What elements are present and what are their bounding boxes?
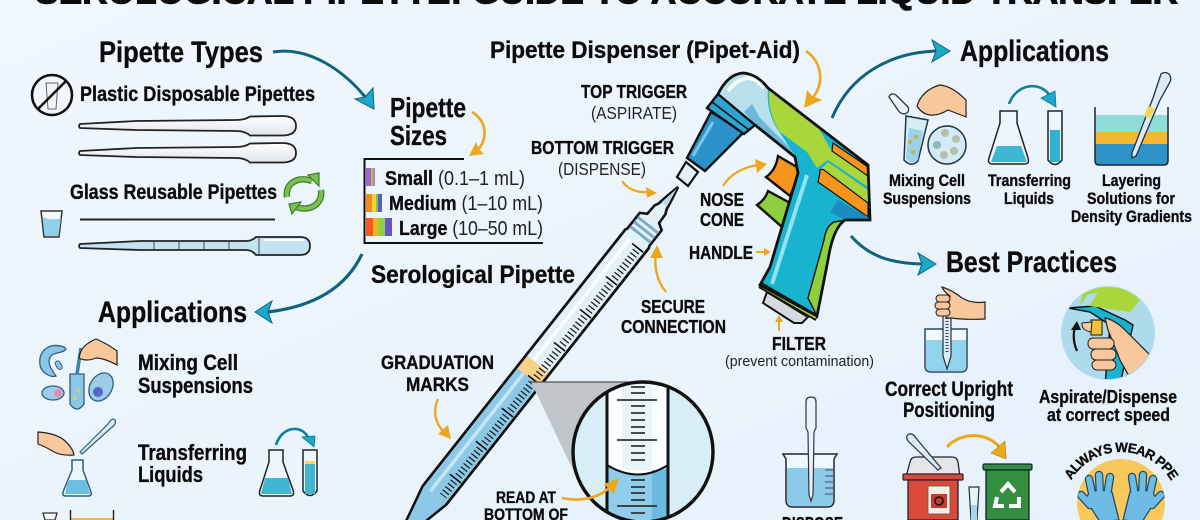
label: nose cone — [700, 190, 744, 230]
label: plastic disposable: Plastic Disposable Pipettes — [80, 83, 315, 106]
size: small: Small (0.1–1 mL) — [385, 168, 525, 190]
arrow: graduation marks — [435, 399, 451, 439]
nose tip — [677, 162, 698, 186]
icon: always wear ppe — [1065, 442, 1179, 520]
label: aspirate — [1039, 387, 1177, 425]
bottom trigger — [757, 191, 792, 227]
panel: applications left — [38, 296, 317, 520]
size: medium: Medium (1–10 mL) — [389, 193, 543, 215]
label: graduation marks: MARKS — [406, 375, 469, 396]
label: layering: Solutions for — [1087, 189, 1175, 208]
filter — [763, 292, 808, 323]
label: handle: HANDLE — [689, 243, 753, 263]
plastic pipette 1 — [79, 116, 296, 136]
icon: recycle arrows — [287, 173, 321, 214]
label: mixing cell left — [138, 350, 253, 398]
arrow: handle — [756, 248, 771, 256]
label: mixing cell left: Suspensions — [138, 373, 253, 398]
label: filter: (prevent contamination) — [725, 354, 874, 370]
label: bottom trigger: (DISPENSE) — [558, 159, 646, 179]
arrow: filter — [775, 315, 783, 331]
icon: aspirate dispense speed — [1061, 286, 1155, 380]
arrow: dispenser — [804, 51, 822, 108]
heading: pipette sizes: Pipette — [390, 92, 466, 123]
plastic pipette 2 — [79, 143, 296, 162]
collar band — [712, 102, 749, 130]
label: filter — [725, 334, 874, 370]
serological pipette — [369, 178, 690, 520]
pipette dispenser gun — [677, 73, 870, 323]
nose cone highlight — [693, 122, 713, 156]
head highlight — [728, 78, 764, 91]
label: bottom trigger: BOTTOM TRIGGER — [531, 138, 674, 158]
label: nose cone: CONE — [700, 210, 744, 230]
label: upright: Positioning — [903, 399, 995, 422]
label: read at bottom: READ AT — [496, 488, 556, 507]
label: transferring left: Transferring — [138, 440, 247, 465]
label: top trigger: (ASPIRATE) — [591, 103, 677, 123]
swatch: medium — [366, 194, 382, 212]
head — [718, 73, 796, 157]
glass pipette — [79, 237, 310, 255]
handle highlight — [772, 175, 807, 284]
label: secure connection — [621, 296, 726, 337]
heading: serological pipette: Serological Pipette — [371, 261, 575, 289]
green handle inlay — [808, 220, 846, 316]
icon: mixing cell suspensions — [40, 339, 118, 409]
icon: transferring right — [988, 86, 1062, 164]
icon: flask and tube transfer — [259, 429, 317, 496]
label: mixing cell left: Mixing Cell — [138, 350, 238, 375]
label: upright: Correct Upright — [885, 378, 1013, 401]
icon: upright positioning — [925, 287, 985, 372]
heading: applications left: Applications — [98, 296, 247, 329]
top trigger — [766, 156, 802, 196]
icon: layering left — [43, 510, 114, 520]
heading: pipette dispenser: Pipette Dispenser (Pipet-Aid) — [490, 37, 800, 64]
label: mixing cell right: Mixing Cell — [889, 171, 965, 190]
panel: pipette types — [32, 36, 321, 255]
body outline — [718, 73, 870, 316]
label: layering — [1071, 171, 1192, 226]
label: aspirate: Aspirate/Dispense — [1039, 387, 1177, 407]
arrow: secure connection — [650, 245, 666, 292]
icon: cup — [41, 211, 62, 237]
label: glass reusable: Glass Reusable Pipettes — [70, 181, 277, 204]
sizes bracket — [364, 159, 543, 243]
arrow: nose cone — [723, 159, 767, 186]
green lower band — [820, 162, 868, 202]
label: secure connection: SECURE — [641, 296, 705, 317]
green top panel — [769, 90, 868, 187]
collar — [707, 94, 755, 134]
divider line — [80, 218, 275, 220]
label: filter: FILTER — [772, 334, 826, 354]
label: nose cone: NOSE — [700, 190, 744, 210]
icon: mixing cell right — [889, 85, 966, 164]
arrow: sizes to applications — [255, 254, 362, 323]
size: large: Large (10–50 mL) — [399, 218, 543, 240]
icon: always wear ppe: ALWAYS WEAR PPE — [1065, 442, 1179, 481]
heading: applications right: Applications — [960, 35, 1109, 68]
head shadow — [744, 104, 796, 157]
panel: pipette sizes — [364, 92, 543, 243]
icon: disposal bins — [903, 434, 1032, 520]
magnified tube — [570, 380, 716, 520]
icon: transferring liquids hand — [38, 419, 116, 496]
panel: magnifier — [484, 380, 716, 520]
heading: pipette types: Pipette Types — [99, 36, 263, 69]
swatch: small — [366, 168, 375, 186]
label: mixing cell right: Suspensions — [883, 189, 971, 208]
arrow: meniscus — [562, 478, 619, 500]
label: top trigger — [581, 82, 687, 123]
label: upright — [885, 378, 1013, 422]
arrow: to tip — [622, 181, 657, 198]
label: transferring right — [988, 171, 1071, 208]
label: secure connection: CONNECTION — [621, 316, 726, 337]
heading: pipette sizes — [390, 92, 466, 151]
label: top trigger: TOP TRIGGER — [581, 82, 687, 102]
label: transferring right: Liquids — [1004, 189, 1054, 208]
arrow: sizes — [469, 112, 485, 156]
panel: best practices — [885, 246, 1179, 520]
icon: center beaker — [783, 397, 837, 507]
label: transferring right: Transferring — [988, 171, 1071, 190]
arrow: to best practices — [851, 236, 936, 275]
heading: pipette sizes: Sizes — [390, 120, 447, 151]
label: layering: Layering — [1102, 171, 1161, 190]
swatch: large — [366, 218, 392, 236]
label: transferring left — [138, 440, 247, 487]
label: mixing cell right — [883, 171, 971, 208]
nose cone — [687, 112, 744, 171]
arrow: to applications right — [832, 40, 950, 118]
icon: layered beaker — [1095, 72, 1171, 165]
orange side stripe 1 — [832, 143, 868, 176]
bottom plate — [760, 285, 817, 318]
icon: prohibited cup — [32, 75, 72, 115]
label: transferring left: Liquids — [138, 462, 203, 487]
heading: best practices: Best Practices — [946, 246, 1117, 279]
label: graduation marks: GRADUATION — [381, 353, 494, 374]
panel: applications right — [883, 35, 1192, 226]
magnifier cone — [531, 382, 632, 472]
orange side stripe 2 — [818, 169, 868, 217]
label: read at bottom — [484, 488, 568, 520]
handle back shade — [830, 200, 870, 220]
label: graduation marks — [381, 353, 494, 396]
handle and body — [718, 73, 870, 316]
label: bottom trigger — [531, 138, 674, 179]
label: aspirate: at correct speed — [1047, 405, 1170, 425]
arrow: types to sizes — [273, 51, 374, 109]
